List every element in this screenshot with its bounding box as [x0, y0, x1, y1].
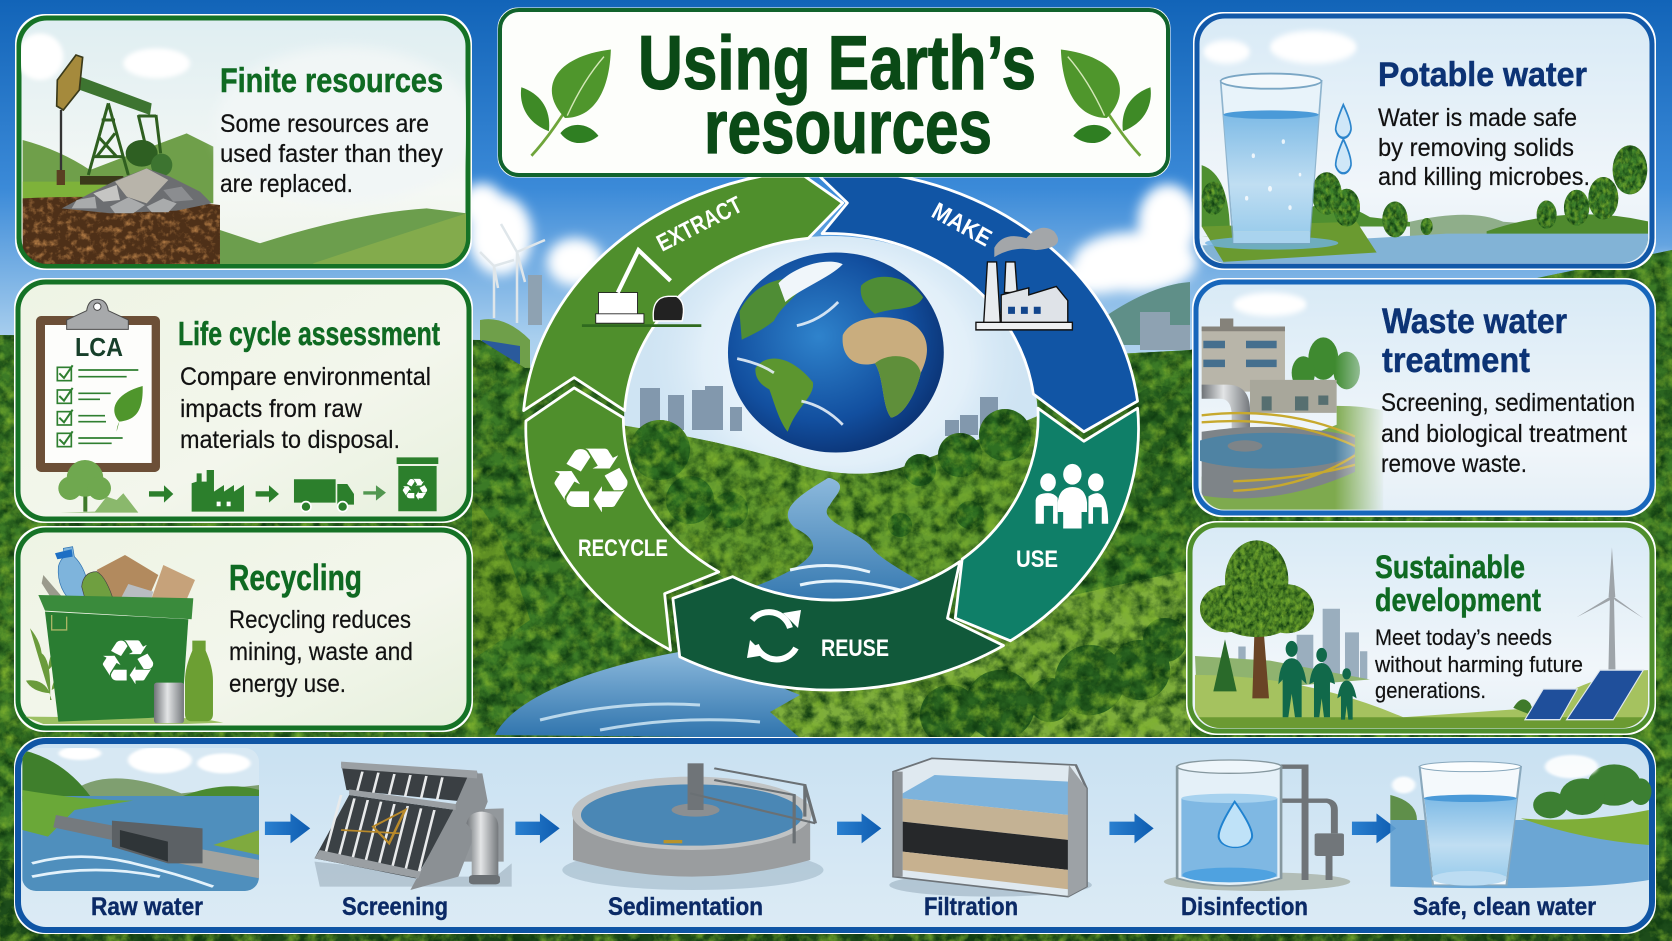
label: disinfection: Disinfection — [1181, 893, 1308, 921]
panel: recycling — [14, 526, 473, 732]
heading: waste water treatment: Waste water — [1382, 302, 1567, 341]
background: foliage landscape — [0, 250, 1672, 941]
step: sedimentation — [562, 763, 823, 921]
heading: waste water treatment: treatment — [1382, 341, 1530, 380]
wash behind text — [210, 48, 466, 170]
illustration: treatment plant — [1185, 293, 1383, 510]
illustration: hills — [17, 33, 467, 267]
heading: potable water: Potable water — [1378, 56, 1587, 94]
heading: life cycle assessment: Life cycle assessment — [178, 315, 440, 352]
panel: waste water treatment — [1185, 278, 1656, 517]
inner ring scene — [624, 236, 1038, 599]
text: waste water body: remove waste. — [1381, 450, 1527, 478]
heading: recycling: Recycling — [229, 557, 362, 598]
icon: excavator — [582, 250, 701, 326]
illustration: filter bed — [889, 758, 1092, 897]
inner scene: city skyline — [640, 386, 1012, 437]
icon: recycling bin — [25, 547, 223, 724]
text: finite resources body — [220, 110, 443, 198]
icon: recycle on big bin: ♻ — [97, 626, 159, 699]
panel: life cycle assessment — [14, 278, 473, 523]
text: LCA body: materials to disposal. — [180, 426, 400, 454]
text: sustainable development body: without harming future — [1374, 652, 1583, 677]
text: waste water body: and biological treatment — [1381, 420, 1627, 448]
globe: Central Africa vegetation — [875, 356, 921, 418]
globe: clouds — [778, 262, 843, 302]
illustration: wind turbine — [1577, 547, 1643, 677]
step: safe clean water — [1390, 755, 1651, 921]
icon: left leaves — [521, 50, 611, 156]
heading: sustainable development — [1375, 549, 1541, 618]
illustration: pump jack — [57, 55, 172, 185]
title panel — [498, 8, 1170, 177]
title text: Using Earth’s — [638, 21, 1036, 106]
illustration: solar panels — [1525, 670, 1643, 720]
illustration: rock pile — [62, 168, 212, 213]
ring segment: recycle — [526, 388, 719, 650]
globe: Africa — [843, 317, 927, 418]
text: sustainable development body — [1374, 625, 1583, 703]
icon: people — [1036, 464, 1108, 529]
step: screening — [314, 762, 512, 921]
text: potable water body: by removing solids — [1378, 134, 1574, 162]
illustration: raw water intake — [22, 747, 260, 893]
icon: recycle on bin: ♻ — [400, 473, 430, 508]
text: waste water body — [1381, 389, 1635, 478]
illustration: city and meadow — [1195, 609, 1650, 729]
globe — [728, 252, 944, 453]
illustration: clean glass — [1420, 762, 1521, 886]
text: potable water body — [1378, 104, 1590, 191]
icon: life cycle stages — [58, 457, 438, 513]
heading: finite resources: Finite resources — [220, 62, 443, 100]
label: use: USE — [1016, 546, 1058, 573]
illustration: river scene — [1390, 755, 1651, 888]
illustration: soil mound — [23, 197, 220, 267]
text: recycling body: mining, waste and — [229, 638, 413, 666]
icon: LCA clipboard — [36, 299, 160, 472]
inner scene: trees — [630, 409, 1031, 537]
text: finite resources body: used faster than they — [220, 140, 443, 168]
panel: water treatment process — [14, 737, 1656, 934]
label: extract: EXTRACT — [652, 191, 747, 257]
text: sustainable development body: Meet today’s needs — [1375, 625, 1552, 650]
ring segment: extract — [524, 171, 843, 411]
label: raw water: Raw water — [91, 893, 203, 921]
text: LCA body: impacts from raw — [180, 395, 363, 423]
label: sedimentation: Sedimentation — [608, 893, 763, 921]
heading: sustainable development: Sustainable — [1375, 549, 1525, 585]
ring segment: make — [813, 170, 1138, 432]
illustration: tree — [1200, 540, 1314, 698]
text: recycling body — [229, 606, 413, 698]
text: potable water body: and killing microbes. — [1378, 163, 1590, 191]
inner scene: winding river — [757, 478, 920, 599]
arrow: raw water to screening — [265, 813, 310, 843]
label: screening: Screening — [342, 893, 448, 921]
illustration: disinfection tank — [1164, 760, 1350, 891]
background: wind turbines — [480, 224, 545, 323]
ring segment: reuse — [673, 562, 1003, 690]
label: make: MAKE — [927, 198, 996, 252]
text: finite resources body: Some resources are — [220, 110, 429, 138]
text: recycling body: Recycling reduces — [229, 606, 411, 634]
globe: Europe — [861, 277, 923, 314]
text: sustainable development body: generations. — [1375, 678, 1486, 703]
inner scene: green valley — [624, 416, 1037, 586]
illustration: bar screen — [314, 762, 512, 890]
arrow: screening to sedimentation — [515, 813, 560, 843]
background: clouds — [460, 183, 1672, 313]
heading: waste water treatment — [1382, 302, 1567, 380]
cycle ring — [524, 170, 1139, 690]
arrow: disinfection to safe water — [1352, 813, 1396, 843]
icon: reuse arrows — [747, 610, 801, 659]
step: raw water — [22, 747, 260, 921]
panel: potable water — [1193, 12, 1656, 270]
panel: sustainable development — [1186, 521, 1656, 735]
label: reuse: REUSE — [821, 635, 889, 662]
title panel: resources — [704, 85, 992, 170]
heading: sustainable development: development — [1375, 582, 1541, 618]
arrow: sedimentation to filtration — [837, 813, 881, 843]
text: waste water body: Screening, sedimentation — [1381, 389, 1635, 417]
text: LCA label: LCA — [75, 332, 123, 362]
illustration: family silhouettes — [1278, 641, 1357, 720]
globe: North America — [739, 278, 802, 340]
icon: glass of water — [1205, 74, 1338, 250]
illustration: settling tank — [562, 763, 823, 890]
text: recycling body: energy use. — [229, 670, 346, 698]
text: potable water body: Water is made safe — [1378, 104, 1577, 132]
illustration: river landscape — [1202, 31, 1650, 269]
icon: right leaves — [1061, 50, 1151, 156]
icon: factory — [976, 228, 1072, 330]
label: recycle: RECYCLE — [578, 535, 668, 562]
icon: recycle: ♻ — [546, 429, 636, 534]
arrow: filtration to disinfection — [1109, 813, 1154, 843]
background: distant hills and city — [480, 275, 1190, 380]
text: LCA body — [180, 363, 431, 454]
globe: South America — [755, 358, 813, 432]
label: filtration: Filtration — [924, 893, 1018, 921]
panel: finite resources — [15, 14, 475, 270]
text: finite resources body: are replaced. — [220, 170, 353, 198]
icon: water drops — [1336, 105, 1351, 173]
step: disinfection — [1164, 760, 1350, 921]
step: filtration — [889, 758, 1092, 921]
text: LCA body: Compare environmental — [180, 363, 431, 391]
ring segment: use — [955, 408, 1139, 641]
label: safe clean water: Safe, clean water — [1413, 893, 1596, 921]
